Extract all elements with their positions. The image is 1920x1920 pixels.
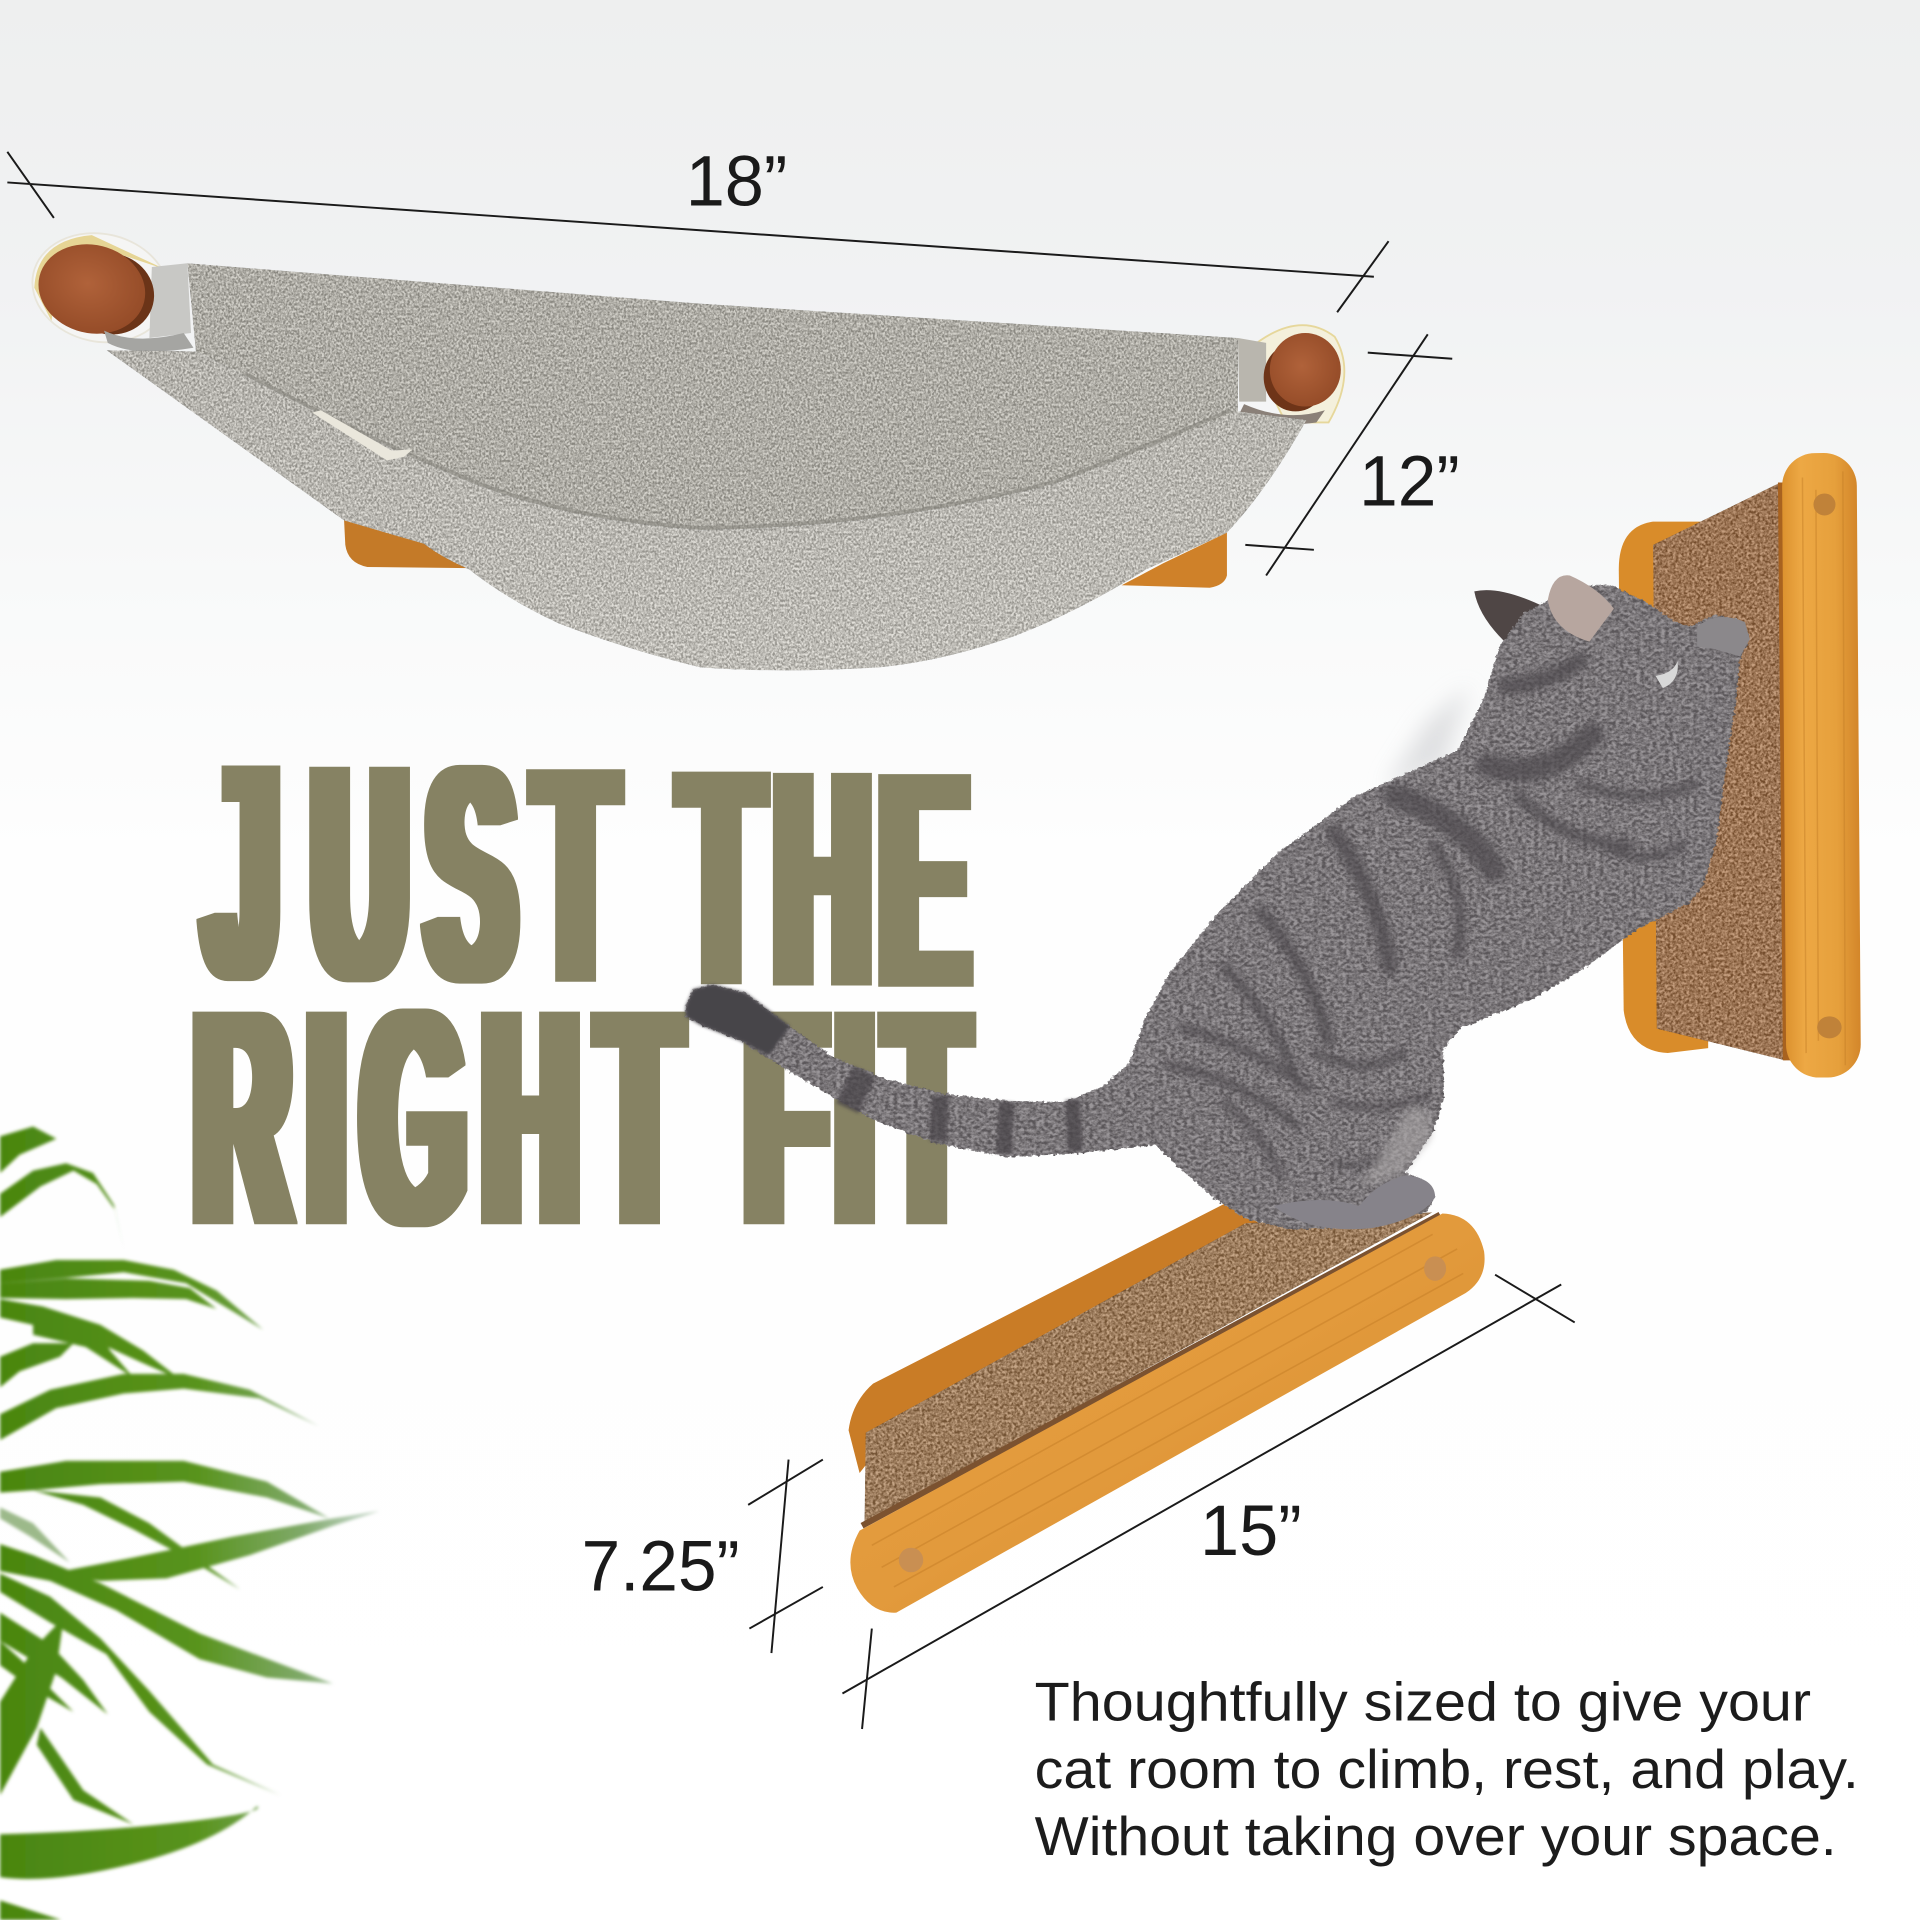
- upper fronds: [0, 1127, 125, 1254]
- title: JUST THE: [205, 700, 968, 1051]
- 12 inch line: [1245, 334, 1452, 576]
- dimension lines: [7, 152, 1575, 1729]
- back inner panel: [187, 263, 1238, 530]
- tail rings: [847, 1071, 1075, 1153]
- chin fur: [1656, 661, 1678, 688]
- bottom screw: [1817, 1016, 1842, 1038]
- screw right: [1424, 1256, 1446, 1281]
- tail tip: [686, 984, 790, 1056]
- scratcher angled: [849, 1202, 1485, 1613]
- seam: [862, 1215, 1440, 1526]
- tagline: Thoughtfully sized to give your: [1035, 1670, 1811, 1732]
- dimension labels: 7.25”: [582, 1528, 740, 1607]
- front rail: [850, 1213, 1485, 1613]
- dark tabby stripes: [1169, 661, 1696, 1176]
- cat shadow: [1384, 686, 1469, 790]
- dimension labels: 15”: [1200, 1492, 1302, 1571]
- 18 inch line: [7, 152, 1389, 312]
- hammock fabric: [107, 263, 1307, 670]
- 7.25 inch line: [748, 1460, 823, 1653]
- screw left: [899, 1548, 923, 1572]
- lower fronds: [0, 1511, 380, 1920]
- top screw: [1813, 493, 1836, 516]
- title: [195, 700, 968, 1288]
- rail grain: [1802, 471, 1845, 1065]
- dimension labels: [582, 143, 1460, 1607]
- right suction cup and peg: [1238, 325, 1344, 424]
- dimension labels: 18”: [686, 143, 787, 222]
- cat: [686, 575, 1750, 1229]
- rail grain: [872, 1234, 1463, 1587]
- hind paw: [1273, 1176, 1435, 1229]
- fabric tag: [312, 410, 413, 460]
- wall mount feet: [344, 520, 1227, 588]
- front paws: [1697, 617, 1750, 656]
- 15 inch line: [842, 1275, 1575, 1729]
- faint frond: [0, 1507, 70, 1562]
- front rail: [1782, 453, 1861, 1078]
- front outer panel: [107, 350, 1307, 670]
- back rail: [849, 1202, 1261, 1473]
- back rail: [1619, 522, 1708, 1053]
- near ear: [1548, 575, 1614, 642]
- far ear: [1474, 590, 1545, 645]
- middle fronds: [0, 1260, 329, 1589]
- left suction cup and peg: [22, 221, 193, 355]
- palm plant: [0, 1127, 380, 1920]
- dimension labels: 12”: [1359, 443, 1460, 522]
- tagline: [1035, 1670, 1859, 1867]
- rail shadow seam: [1778, 482, 1795, 1060]
- title: RIGHT FIT: [195, 946, 967, 1288]
- sisal surface: [1653, 482, 1785, 1060]
- hammock product: [22, 221, 1344, 670]
- sisal surface: [864, 1212, 1433, 1523]
- scratcher vertical: [1619, 453, 1861, 1078]
- light belly: [1359, 1107, 1431, 1188]
- pocket seam shadow: [245, 373, 1231, 528]
- tagline: cat room to climb, rest, and play.: [1035, 1738, 1859, 1800]
- tagline: Without taking over your space.: [1035, 1805, 1837, 1867]
- body and tail: [686, 585, 1750, 1229]
